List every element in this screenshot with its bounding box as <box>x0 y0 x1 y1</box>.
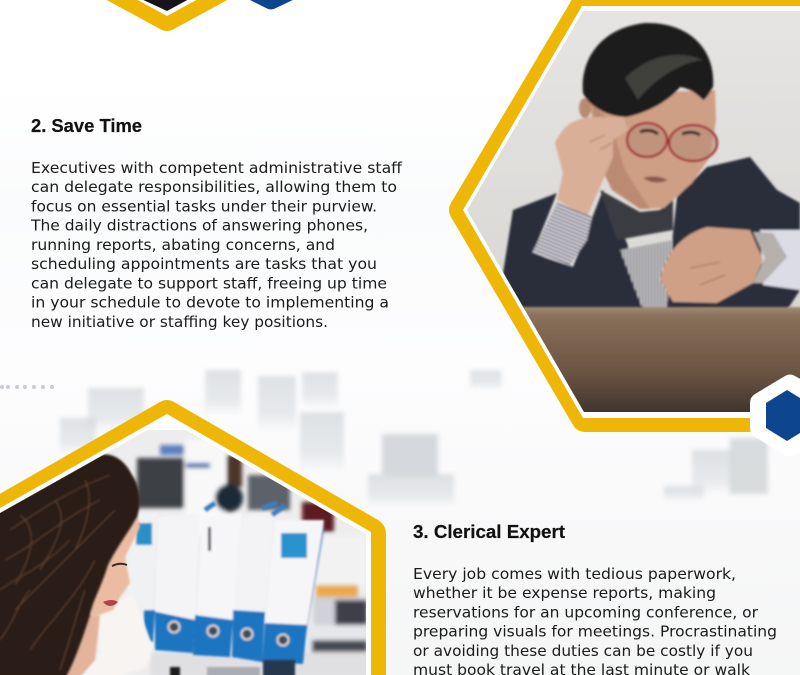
text block: save time body: in your schedule to devote to implementing a <box>31 295 389 312</box>
blue hexagon fragment <box>246 0 297 10</box>
photo contents <box>460 5 800 420</box>
photo hexagon: man checking his watch <box>449 0 800 432</box>
text block: clerical expert body <box>413 566 777 675</box>
red glasses <box>627 123 717 161</box>
yellow hexagon frame <box>0 400 386 675</box>
face <box>588 90 716 209</box>
laptop <box>522 306 800 412</box>
raised hand <box>555 117 628 217</box>
text block: save time body: scheduling appointments are tasks that you <box>31 256 377 273</box>
striped cuff <box>532 203 592 265</box>
woman's white blouse <box>84 599 152 675</box>
mouth shadow <box>643 176 668 183</box>
white and blue hexagon badge <box>750 374 800 456</box>
text block: save time body: running reports, abating concerns, and <box>31 237 335 254</box>
heading: 3. Clerical Expert: 3. Clerical Expert <box>413 521 565 542</box>
text block: save time body: new initiative or staffing key positions. <box>31 314 328 331</box>
text block: clerical expert body: reservations for an upcoming conference, or <box>413 604 759 622</box>
woman's curly hair <box>0 454 140 675</box>
text block: save time body <box>30 160 403 331</box>
desk items <box>170 660 295 675</box>
text block: save time body: focus on essential tasks under their purview. <box>31 198 377 216</box>
wristwatch <box>753 232 787 283</box>
yellow hexagon frame <box>449 0 800 432</box>
photo hexagon: woman with binders <box>0 400 386 675</box>
text block: save time body: can delegate responsibilities, allowing them to <box>31 179 397 196</box>
photo contents <box>0 415 370 675</box>
wristwatch hand <box>660 227 763 303</box>
text block: clerical expert body: preparing visuals for meetings. Procrastinating <box>413 624 777 641</box>
text block: clerical expert body: or avoiding these duties can be costly if you <box>413 643 753 660</box>
white inner border <box>0 414 371 675</box>
decorative foggy cityscape <box>60 370 768 506</box>
yellow and black hexagon fragment <box>103 0 231 31</box>
jacket <box>503 157 800 310</box>
text block: save time body: The daily distractions of answering phones, <box>30 218 368 235</box>
heading: 2. Save Time: 2. Save Time <box>31 115 142 136</box>
wrist sleeve <box>760 230 800 290</box>
top hexagon fragments from previous section <box>103 0 297 31</box>
row of grey dots <box>0 385 54 389</box>
blurred office background <box>137 440 370 675</box>
text block: save time body: can delegate to support staff, freeing up time <box>31 276 387 292</box>
shirt <box>600 190 673 310</box>
hair <box>583 23 713 117</box>
white inner border <box>463 6 800 418</box>
blue binders <box>127 503 324 664</box>
woman's neck and chest <box>66 614 101 675</box>
text block: clerical expert body: whether it be expense reports, making <box>413 585 716 602</box>
text block: save time body: Executives with competent administrative staff <box>31 160 403 177</box>
woman's face <box>90 514 142 616</box>
text block: clerical expert body: Every job comes with tedious paperwork, <box>413 566 736 583</box>
ear <box>579 98 591 118</box>
